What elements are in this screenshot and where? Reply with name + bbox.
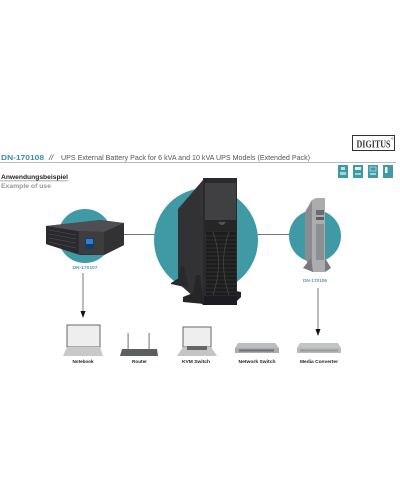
icon: media converter [297, 343, 341, 353]
label: KVM switch: KVM Switch [182, 359, 210, 365]
circle: center [154, 188, 258, 292]
label: router: Router [132, 359, 147, 365]
connector: left UPS to center [123, 232, 171, 236]
device: slim UPS DN-170106 [303, 198, 331, 272]
title: product heading: DN-170108 [1, 153, 44, 162]
subheading: example of use: Anwendungsbeispiel [1, 174, 68, 181]
label: notebook: Notebook [72, 359, 94, 365]
title: product heading: UPS External Battery Pack for 6 kVA and 10 kVA UPS Models (Extended Pack) [61, 153, 310, 162]
circle: right [289, 210, 341, 262]
label: DN-170106: DN-170106 [303, 278, 327, 284]
device: rack UPS DN-170107 [46, 220, 124, 255]
arrow: down to notebook [80, 273, 86, 318]
label: DN-170107: DN-170107 [72, 265, 98, 271]
label: network switch: Network Switch [238, 359, 276, 365]
label: media converter: Media Converter [300, 359, 338, 365]
logo: DIGITUS [352, 136, 394, 150]
icon: KVM switch [177, 327, 217, 356]
icon: network switch [235, 343, 279, 353]
device: tower UPS center [171, 178, 241, 305]
subheading: example of use [0, 174, 68, 190]
circle: left [58, 209, 112, 263]
title: product heading [0, 153, 396, 163]
subheading: example of use: Example of use [1, 183, 52, 190]
arrow: down to media converter [316, 288, 320, 336]
icon: notebook [63, 325, 103, 356]
icon: router [120, 333, 158, 356]
feature icons [338, 165, 393, 178]
title: product heading: // [48, 153, 54, 162]
connector: right UPS to center [244, 232, 289, 236]
